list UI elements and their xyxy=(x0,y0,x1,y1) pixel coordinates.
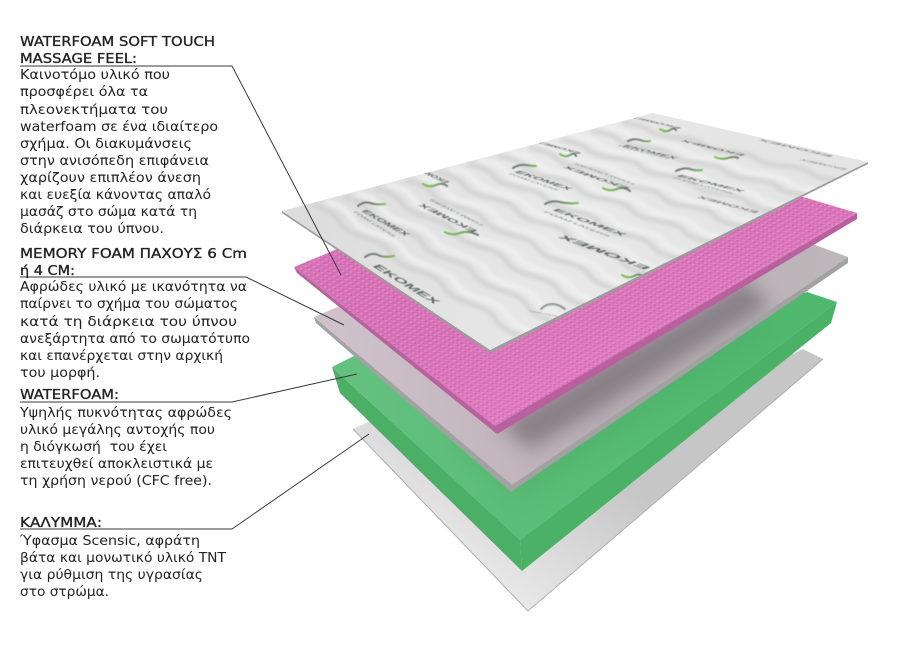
printed logos: EKOMEX xyxy=(620,144,680,159)
body text: υλικό μεγάλης αντοχής που xyxy=(20,423,215,438)
printed logos: EKOMEX xyxy=(412,166,452,184)
body text: προσφέρει όλα τα xyxy=(20,85,148,100)
body text: Αφρώδες υλικό με ικανότητα να xyxy=(20,280,247,295)
printed logos: FOAM LAYERS xyxy=(506,173,560,191)
body text: του μορφή. xyxy=(20,366,100,381)
printed logos: FOAM LAYERS xyxy=(527,310,559,317)
printed logos: EKOMEX xyxy=(359,209,413,237)
printed logos: EKOMEX xyxy=(512,170,575,191)
body text xyxy=(20,68,218,237)
printed logos: FOAM LAYERS xyxy=(615,145,671,160)
printed logos: EKOMEX xyxy=(532,140,584,154)
printed logos: EKOMEX xyxy=(695,195,762,213)
printed logos: EKOMEX xyxy=(560,165,632,190)
printed logos: FOAM LAYERS xyxy=(351,211,397,238)
layer: pink memory foam xyxy=(294,197,857,434)
body text xyxy=(20,280,250,381)
body text: κατά τη διάρκεια του ύπνου xyxy=(20,315,237,330)
printed logos: EKOMEX xyxy=(627,116,683,129)
heading: MASSAGE FEEL: xyxy=(20,52,137,67)
body text: και επανέρχεται στην αρχική xyxy=(20,349,223,364)
printed logos: EKOMEX xyxy=(370,263,443,305)
printed logos: EKOMEX xyxy=(674,174,748,193)
body text: η διόγκωσή του έχει xyxy=(20,440,167,455)
body text xyxy=(19,406,232,489)
printed logos: EKOMEX xyxy=(797,158,850,170)
body text: διάρκεια του ύπνου. xyxy=(20,222,164,237)
body text xyxy=(19,534,226,600)
printed logos xyxy=(351,116,850,317)
layer: bottom cover sheet xyxy=(353,349,823,611)
body text: στο στρώμα. xyxy=(20,585,109,600)
printed logos: FOAM LAYERS xyxy=(428,198,486,226)
leader line: waterfoam xyxy=(20,374,357,402)
layer: gray foam sheet xyxy=(314,245,848,492)
body text: βάτα και μονωτικό υλικό ΤΝΤ xyxy=(20,551,226,566)
printed logos: EKOMEX xyxy=(756,139,836,157)
heading: ΚΑΛΥΜΜΑ: xyxy=(20,516,102,531)
heading xyxy=(20,247,247,279)
heading: MEMORY FOAM ΠΑΧΟΥΣ 6 Cm xyxy=(20,247,247,262)
leader line: cover xyxy=(20,434,369,529)
heading: WATERFOAM: xyxy=(20,388,119,403)
body text: χαρίζουν επιπλέον άνεση xyxy=(20,171,201,186)
body text: επιτευχθεί αποκλειστικά με xyxy=(20,457,213,472)
heading: WATERFOAM SOFT TOUCH xyxy=(20,35,215,50)
printed logos: EKOMEX xyxy=(555,234,655,270)
text block: cover xyxy=(19,516,226,600)
layer: top waterfoam soft touch sheet xyxy=(282,113,868,353)
body text: ανεξάρτητα από το σωματότυπο xyxy=(20,332,250,347)
text block: waterfoam xyxy=(19,388,232,489)
leader line: soft touch sheet xyxy=(20,66,341,275)
leader line: memory foam xyxy=(20,277,344,325)
body text: στην ανισόπεδη επιφάνεια xyxy=(20,154,209,169)
body text: μασάζ στο σώμα κατά τη xyxy=(20,205,197,220)
body text: Καινοτόμο υλικό που xyxy=(20,68,170,83)
body text: waterfoam σε ένα ιδιαίτερο xyxy=(20,120,218,135)
printed logos: EKOMEX xyxy=(550,208,629,237)
body text: τη χρήση νερού (CFC free). xyxy=(20,474,212,489)
heading xyxy=(20,35,215,67)
wave texture xyxy=(309,116,850,337)
printed logos: EKOMEX xyxy=(417,203,480,233)
body text: και ευεξία κάνοντας απαλό xyxy=(20,188,211,203)
printed logos: FOAM LAYERS xyxy=(573,163,637,185)
layer: green waterfoam block xyxy=(332,292,837,571)
text block: waterfoam soft touch massage feel xyxy=(20,35,218,237)
body text: Ύφασμα Scensic, αφράτη xyxy=(19,534,200,549)
body text: για ρύθμιση της υγρασίας xyxy=(20,568,203,583)
printed logos: FOAM LAYERS xyxy=(671,177,735,194)
body text: Υψηλής πυκνότητας αφρώδες xyxy=(19,406,232,421)
body text: πλεονεκτήματα του xyxy=(20,103,168,118)
printed logos: FOAM LAYERS xyxy=(542,211,611,237)
heading: ή 4 CM: xyxy=(20,264,75,279)
body text: παίρνει το σχήμα του σώματος xyxy=(20,297,238,312)
body text: σχήμα. Οι διακυμάνσεις xyxy=(20,137,192,152)
printed logos: EKOMEX xyxy=(679,139,748,156)
text block: memory foam xyxy=(20,247,250,381)
